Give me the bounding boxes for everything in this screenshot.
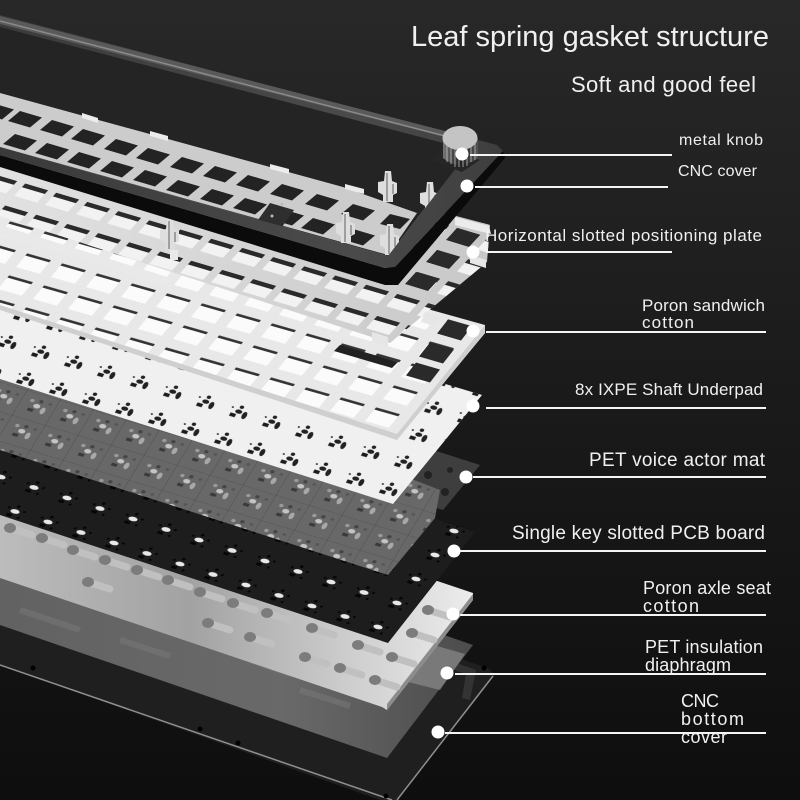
callout: PET voice actor mat: PET voice actor mat	[589, 450, 766, 471]
callout: Poron sandwich cotton: Poron sandwich	[642, 296, 765, 315]
layer: CNC cover frame	[0, 15, 505, 285]
callout: 8x IXPE Shaft Underpad: 8x IXPE Shaft Underpad	[575, 380, 763, 399]
heading: title: Leaf spring gasket structure	[411, 21, 769, 53]
layer: stabilizer switches	[160, 171, 439, 255]
callout: CNC cover	[460, 163, 758, 192]
layer: PET voice actor mat	[0, 320, 480, 575]
callout: Horizontal slotted positioning plate: Horizontal slotted positioning plate	[485, 226, 762, 245]
callout: Poron sandwich cotton: cotton	[642, 313, 694, 332]
icon: metal knob	[430, 126, 480, 172]
callout: Single key slotted PCB board	[448, 523, 766, 558]
callout: CNC bottom cover: cover	[681, 727, 727, 747]
layer: 8x IXPE shaft underpad	[0, 250, 482, 504]
callout: CNC bottom cover	[432, 691, 766, 747]
layer: Single key slotted PCB board	[0, 375, 475, 643]
callout: Horizontal slotted positioning plate	[466, 226, 762, 258]
callout: CNC bottom cover: bottom	[681, 709, 744, 729]
callout: Poron axle seat cotton	[446, 578, 771, 620]
layer: CNC bottom cover	[0, 510, 495, 800]
callout: Poron axle seat cotton: cotton	[643, 596, 699, 616]
callout: metal knob: metal knob	[679, 132, 763, 149]
callout: metal knob	[456, 132, 763, 160]
layer: opening inside CNC cover	[0, 27, 470, 256]
callout: PET insulation diaphragm: PET insulation	[645, 637, 763, 657]
callout: PET insulation diaphragm: diaphragm	[645, 655, 731, 675]
callout: CNC bottom cover: CNC	[681, 691, 719, 711]
heading: subtitle: Soft and good feel	[571, 72, 756, 97]
callout: 8x IXPE Shaft Underpad	[466, 380, 766, 412]
callout: PET voice actor mat	[460, 450, 766, 484]
layer: Poron axle seat cotton	[0, 434, 473, 710]
layer: top plate inside cover	[0, 93, 417, 255]
callout: Single key slotted PCB board: Single key slotted PCB board	[512, 523, 765, 544]
layer: Horizontal slotted positioning plate	[0, 100, 491, 347]
layer: PET insulation diaphragm	[0, 482, 473, 758]
callout: Poron sandwich cotton	[466, 296, 766, 338]
layer: Poron sandwich cotton	[0, 190, 485, 440]
callout: Poron axle seat cotton: Poron axle seat	[643, 578, 771, 598]
callout: CNC cover: CNC cover	[678, 163, 758, 180]
callout: PET insulation diaphragm	[440, 637, 766, 680]
